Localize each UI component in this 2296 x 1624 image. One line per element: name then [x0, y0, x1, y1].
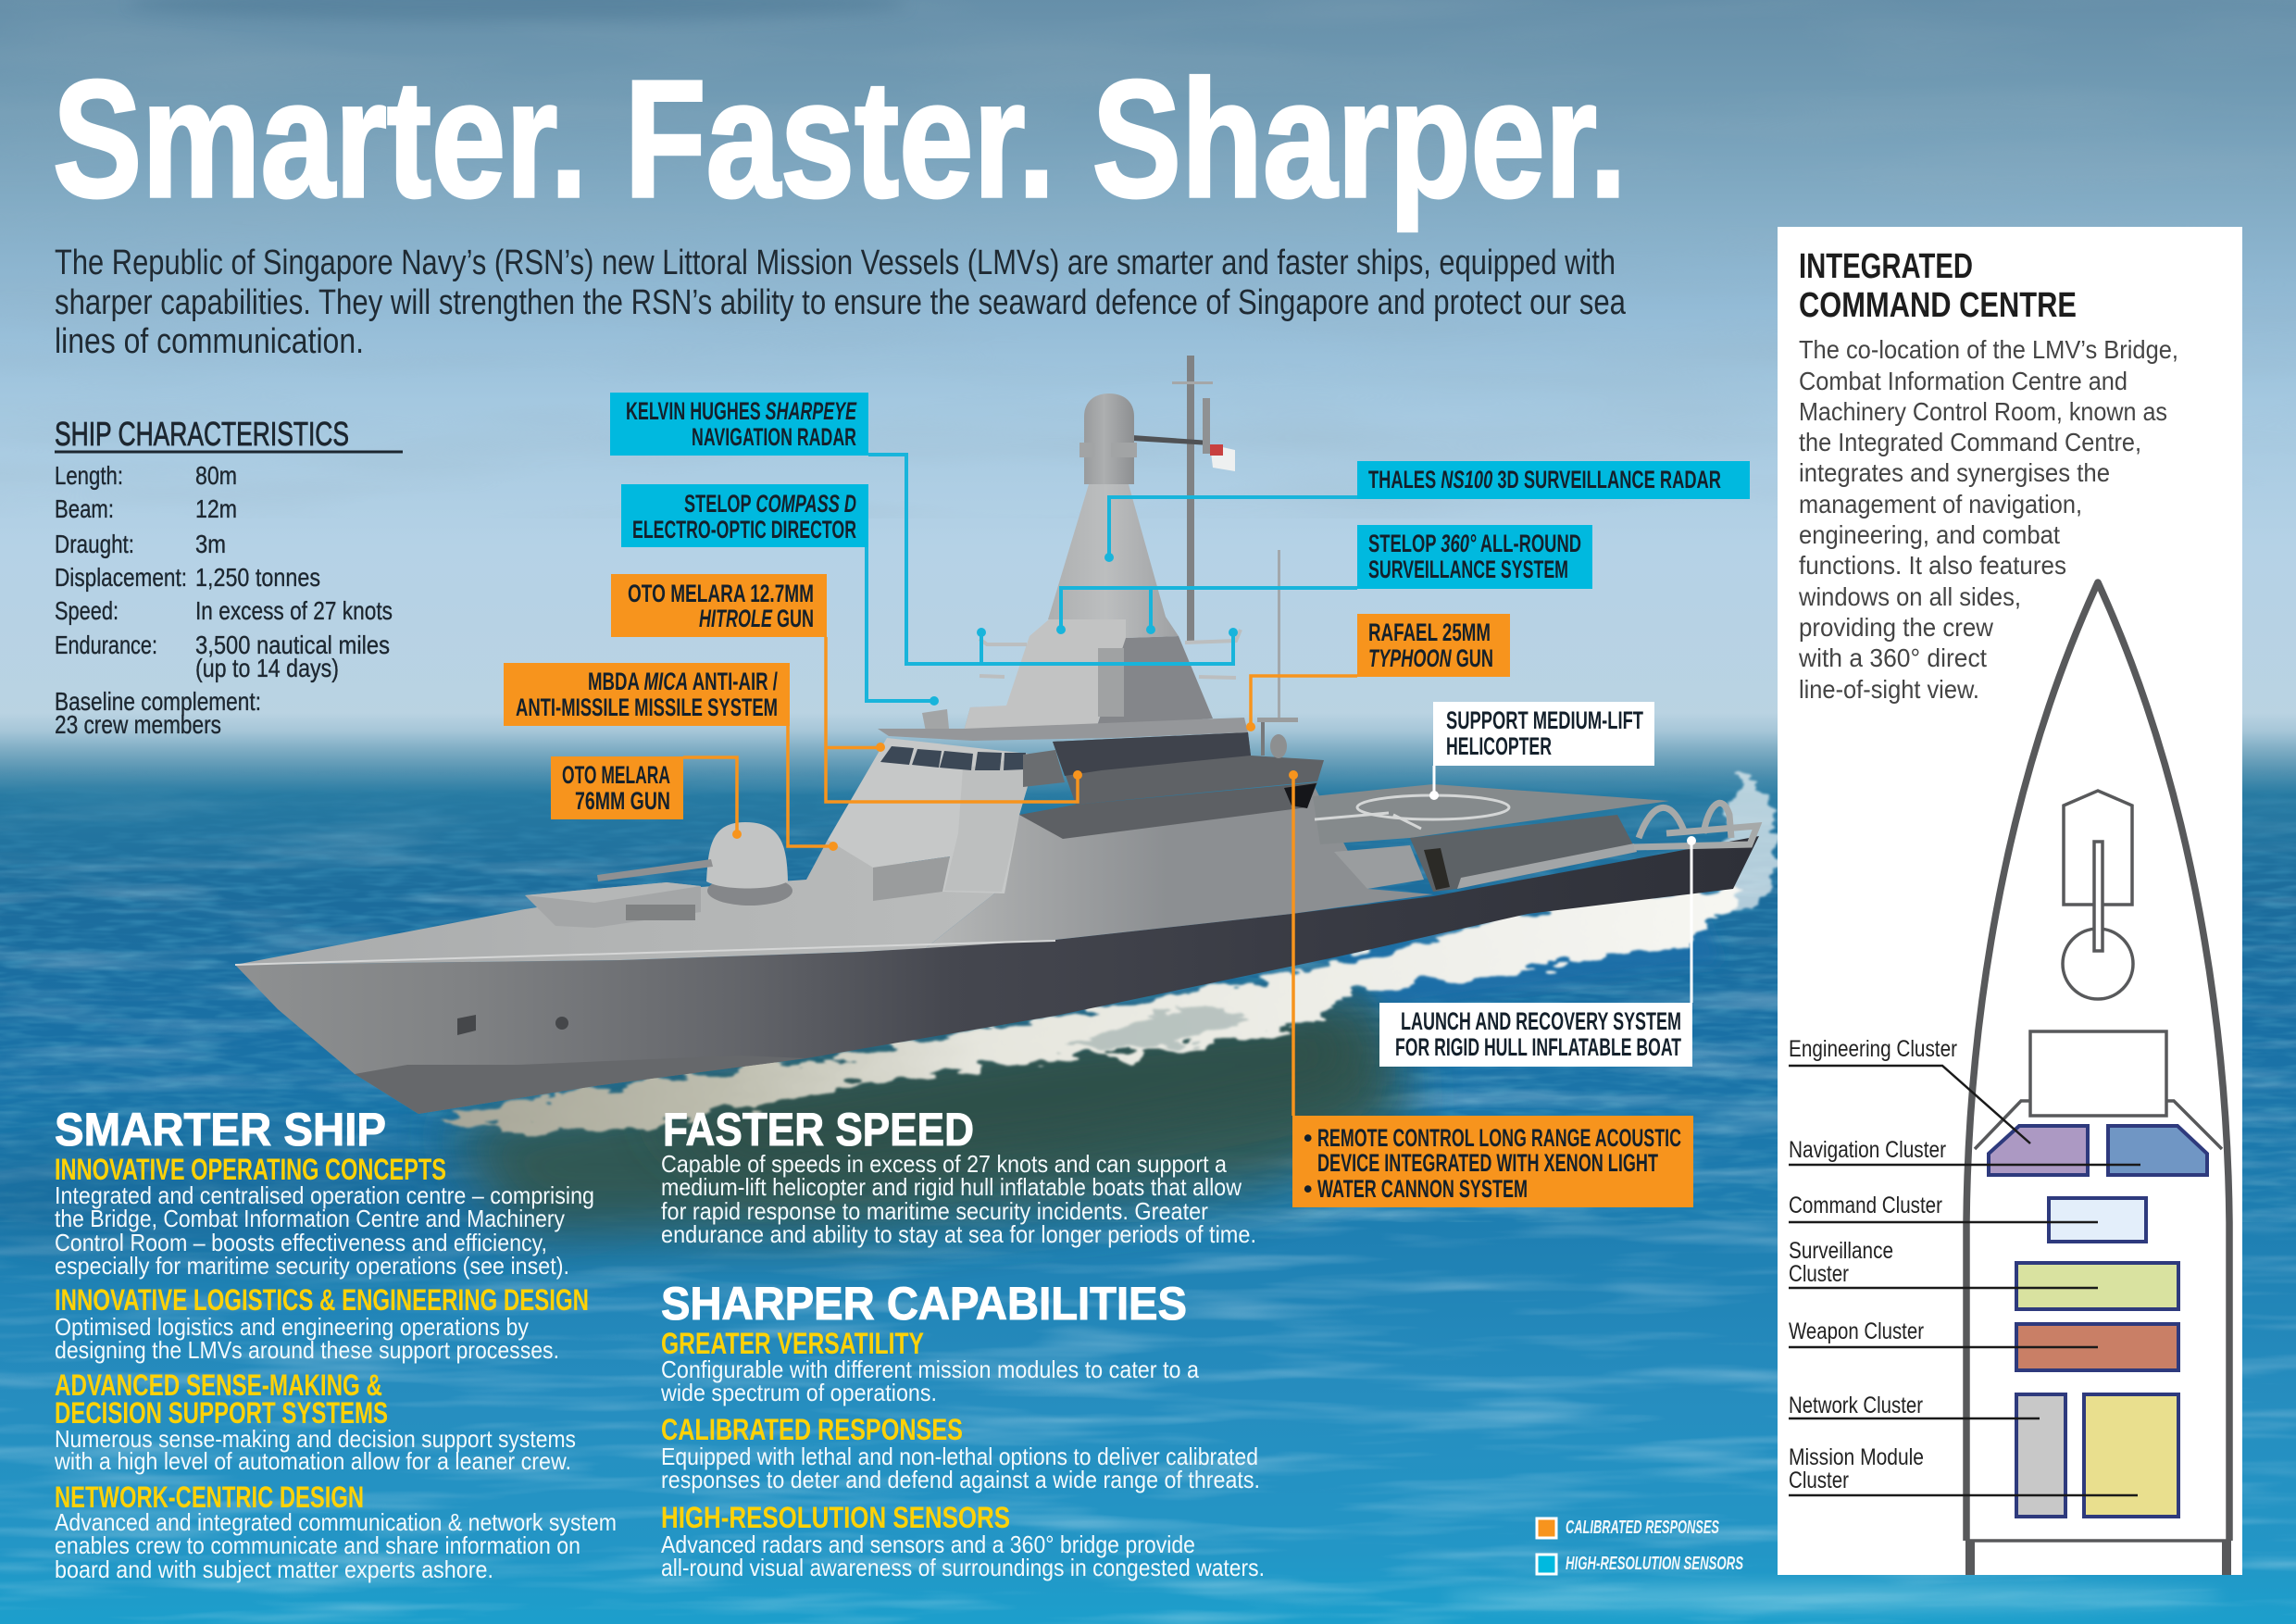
characteristics table: In excess of 27 knots [195, 596, 393, 625]
callout: hitrole gun [611, 574, 827, 637]
heading: SMARTER SHIP [55, 1104, 386, 1156]
callout: all-round surveillance: SURVEILLANCE SYSTEM [1368, 556, 1568, 583]
calibrated responses: CALIBRATED RESPONSES [661, 1413, 963, 1446]
callout: surveillance radar [1357, 461, 1750, 499]
panel text: management of navigation, [1799, 490, 2082, 518]
panel text: functions. It also features [1799, 551, 2066, 580]
callout: typhoon gun [1357, 614, 1510, 677]
legend: CALIBRATED RESPONSES [1566, 1518, 1719, 1538]
callout: acoustic device and water cannon: • [1304, 1124, 1312, 1152]
callout: navigation radar [610, 393, 868, 456]
forward turret [922, 709, 949, 731]
network-centric design: board and with subject matter experts ashore. [55, 1555, 493, 1583]
callout: electro-optic director [621, 484, 868, 547]
aft antenna and dish [1278, 550, 1280, 719]
panel text: Combat Information Centre and [1799, 367, 2128, 395]
innovative operating concepts: Control Room – boosts effectiveness and efficiency, [55, 1229, 547, 1256]
callout: all-round surveillance [1357, 525, 1592, 589]
callout: 76mm gun: OTO MELARA [562, 761, 670, 789]
intro paragraph [55, 244, 1627, 361]
section: faster speed [661, 1104, 1256, 1248]
radar arms [980, 630, 1241, 678]
greater versatility: wide spectrum of operations. [660, 1379, 937, 1406]
superstructure front [828, 738, 1037, 893]
deck [235, 840, 998, 965]
greater versatility: GREATER VERSATILITY [661, 1327, 924, 1360]
callout: electro-optic director: ELECTRO-OPTIC DIRECTOR [632, 516, 856, 543]
hull [235, 836, 1759, 1114]
panel text: Machinery Control Room, known as [1799, 397, 2167, 426]
main gun [707, 876, 792, 906]
network-centric design: enables crew to communicate and share information on [55, 1531, 580, 1559]
greater versatility [660, 1327, 1199, 1406]
cyan leader dots [930, 553, 1238, 706]
hull side panel [926, 787, 1433, 948]
white leaders [1434, 766, 1691, 1003]
high-resolution sensors [661, 1501, 1265, 1581]
characteristics table: Endurance: [55, 631, 157, 659]
mast [1187, 356, 1194, 643]
breakwater [525, 882, 701, 928]
innovative operating concepts: Integrated and centralised operation centre – comprising [55, 1181, 594, 1209]
section: faster speed: medium-lift helicopter and rigid hull inflatable boats that allow [661, 1173, 1242, 1201]
orange leader dots [732, 722, 1298, 851]
greater versatility: Configurable with different mission modules to cater to a [661, 1355, 1199, 1383]
ship illustration [235, 356, 1778, 1231]
panel text: The co-location of the LMV’s Bridge, [1799, 335, 2178, 364]
characteristics table: 23 crew members [55, 710, 221, 739]
legend [1537, 1518, 1743, 1574]
cluster labels [1789, 1036, 1957, 1493]
characteristics table: (up to 14 days) [195, 654, 339, 682]
cluster labels: Command Cluster [1789, 1193, 1942, 1218]
callout: helicopter: SUPPORT MEDIUM-LIFT [1446, 706, 1643, 734]
innovative operating concepts: INNOVATIVE OPERATING CONCEPTS [55, 1153, 446, 1186]
cluster labels: Cluster [1789, 1468, 1849, 1493]
helicopter deck [1313, 784, 1669, 844]
panel: integrated command centre [1778, 227, 2242, 1575]
callout leader lines [867, 455, 1357, 701]
high-resolution sensors: Advanced radars and sensors and a 360° bridge provide [661, 1530, 1195, 1558]
callout: surveillance radar: THALES NS100 3D SURVEILLANCE RADAR [1368, 466, 1721, 493]
white leader dots [1429, 791, 1696, 845]
cluster labels: Cluster [1789, 1261, 1849, 1287]
legend: HIGH-RESOLUTION SENSORS [1566, 1554, 1743, 1574]
characteristics table: Beam: [55, 494, 114, 523]
callout: mica missile system [504, 663, 790, 726]
launch davits [1634, 803, 1757, 847]
callout: helicopter [1433, 702, 1654, 766]
cone [1048, 484, 1179, 638]
command clusters [1989, 1126, 2207, 1517]
innovative logistics and engineering design: designing the LMVs around these support processes. [55, 1336, 559, 1364]
roof overhang [878, 718, 1248, 741]
advanced sense-making: Numerous sense-making and decision support systems [55, 1425, 576, 1453]
callout: all-round surveillance: STELOP 360° ALL-ROUND [1368, 530, 1581, 557]
section: smarter ship [54, 1104, 617, 1583]
callout: 76mm gun: 76MM GUN [575, 787, 670, 815]
panel text: integrates and synergises the [1799, 458, 2110, 487]
characteristics table [55, 461, 393, 739]
callout: mica missile system: MBDA MICA ANTI-AIR / [588, 668, 778, 695]
section: faster speed: for rapid response to maritime security incidents. Greater [661, 1197, 1208, 1225]
wake [435, 884, 1741, 1131]
characteristics heading: SHIP CHARACTERISTICS [55, 415, 349, 453]
callout: acoustic device and water cannon [1292, 1116, 1693, 1207]
characteristics table: 3m [195, 530, 226, 558]
characteristics table: 1,250 tonnes [195, 563, 320, 592]
section: faster speed: FASTER SPEED [663, 1104, 974, 1156]
callout: electro-optic director: STELOP COMPASS D [684, 490, 856, 518]
title: Smarter. Faster. Sharper. [53, 46, 1627, 232]
panel heading [1799, 247, 2077, 325]
vessel plan diagram [1789, 582, 2231, 1575]
innovative operating concepts: the Bridge, Combat Information Centre and Machinery [55, 1205, 565, 1232]
innovative operating concepts [55, 1153, 594, 1280]
panel text: with a 360° direct [1798, 643, 1987, 672]
characteristics table: 12m [195, 494, 237, 523]
hangar [1410, 815, 1637, 892]
innovative logistics and engineering design: Optimised logistics and engineering operations by [55, 1313, 529, 1341]
characteristics table: Speed: [55, 596, 119, 625]
callout: 76mm gun [551, 756, 683, 819]
intro paragraph: sharper capabilities. They will strengthen the RSN’s ability to ensure the seaward defence of Singapore and protect our sea [55, 283, 1627, 322]
callout: acoustic device and water cannon: DEVICE INTEGRATED WITH XENON LIGHT [1317, 1149, 1658, 1177]
cluster labels: Navigation Cluster [1789, 1137, 1946, 1163]
callout: acoustic device and water cannon: • [1304, 1175, 1312, 1203]
callout: typhoon gun: TYPHOON GUN [1368, 644, 1493, 672]
callout: mica missile system: ANTI-MISSILE MISSILE SYSTEM [516, 693, 778, 721]
intro paragraph: lines of communication. [55, 322, 364, 361]
hull outline [1966, 582, 2229, 1541]
orange leaders [683, 637, 1357, 1116]
characteristics table: Length: [55, 461, 123, 490]
ship characteristics [55, 415, 403, 739]
callout: launch and recovery: FOR RIGID HULL INFLATABLE BOAT [1395, 1033, 1681, 1061]
cluster labels: Engineering Cluster [1789, 1036, 1957, 1062]
section: faster speed: Capable of speeds in excess of 27 knots and can support a [661, 1150, 1227, 1178]
network-centric design: NETWORK-CENTRIC DESIGN [55, 1480, 364, 1514]
bridge windows and roof [880, 746, 1026, 770]
characteristics table: Draught: [55, 530, 134, 558]
callout: hitrole gun: OTO MELARA 12.7MM [628, 580, 814, 607]
innovative logistics and engineering design: INNOVATIVE LOGISTICS & ENGINEERING DESIGN [55, 1283, 589, 1317]
cluster labels: Network Cluster [1789, 1393, 1923, 1418]
stern spray [1724, 776, 1778, 912]
calibrated responses: Equipped with lethal and non-lethal options to deliver calibrated [661, 1443, 1258, 1470]
advanced sense-making: with a high level of automation allow for a leaner crew. [54, 1447, 571, 1475]
panel text: providing the crew [1799, 613, 1994, 642]
callout: helicopter: HELICOPTER [1446, 732, 1552, 760]
panel text: engineering, and combat [1799, 520, 2060, 549]
network-centric design [55, 1480, 617, 1583]
characteristics table: 80m [195, 461, 237, 490]
callout: navigation radar: KELVIN HUGHES SHARPEYE [626, 397, 857, 425]
characteristics table: Displacement: [55, 563, 187, 592]
network-centric design: Advanced and integrated communication & network system [55, 1508, 617, 1536]
panel text: line-of-sight view. [1799, 675, 1979, 704]
callout: launch and recovery: LAUNCH AND RECOVERY SYSTEM [1401, 1007, 1681, 1035]
innovative logistics and engineering design [55, 1283, 589, 1364]
callout: hitrole gun: HITROLE GUN [699, 605, 814, 632]
calibrated responses [661, 1413, 1260, 1493]
upper superstructure [964, 619, 1126, 731]
cyan leaders [867, 455, 1357, 701]
cluster labels: Surveillance [1789, 1238, 1893, 1264]
cluster labels: Weapon Cluster [1789, 1318, 1924, 1344]
section: sharper capabilities [660, 1278, 1265, 1581]
advanced sense-making: DECISION SUPPORT SYSTEMS [55, 1396, 388, 1430]
calibrated responses: responses to deter and defend against a wide range of threats. [661, 1466, 1260, 1493]
radome [1084, 394, 1134, 484]
high-resolution sensors: all-round visual awareness of surroundings in congested waters. [661, 1554, 1265, 1581]
panel text: windows on all sides, [1798, 582, 2021, 611]
callout: launch and recovery [1379, 1003, 1692, 1067]
flag [1210, 444, 1235, 471]
high-resolution sensors: HIGH-RESOLUTION SENSORS [661, 1501, 1010, 1534]
panel heading: COMMAND CENTRE [1799, 286, 2077, 325]
panel text: the Integrated Command Centre, [1799, 428, 2141, 456]
characteristics table: Baseline complement: [55, 687, 261, 716]
deck structures [1975, 791, 2222, 1149]
advanced sense-making: ADVANCED SENSE-MAKING & [55, 1368, 382, 1402]
callout: acoustic device and water cannon: REMOTE CONTROL LONG RANGE ACOUSTIC [1317, 1124, 1681, 1152]
innovative operating concepts: especially for maritime security operations (see inset). [55, 1252, 569, 1280]
heading: SHARPER CAPABILITIES [661, 1278, 1187, 1330]
panel heading: INTEGRATED [1799, 247, 1973, 286]
cluster labels: Mission Module [1789, 1444, 1924, 1470]
callout: typhoon gun: RAFAEL 25MM [1368, 618, 1491, 646]
callout: navigation radar: NAVIGATION RADAR [692, 423, 856, 451]
intro paragraph: The Republic of Singapore Navy’s (RSN’s) new Littoral Mission Vessels (LMVs) are smarter and faster ships, equipped with [55, 244, 1616, 282]
panel text [1798, 335, 2178, 704]
advanced sense-making [54, 1368, 576, 1475]
callout: acoustic device and water cannon: WATER CANNON SYSTEM [1317, 1175, 1528, 1203]
section: faster speed: endurance and ability to stay at sea for longer periods of time. [661, 1220, 1256, 1248]
characteristics table: 3,500 nautical miles [195, 631, 390, 659]
cluster leader lines [1789, 1066, 2140, 1495]
